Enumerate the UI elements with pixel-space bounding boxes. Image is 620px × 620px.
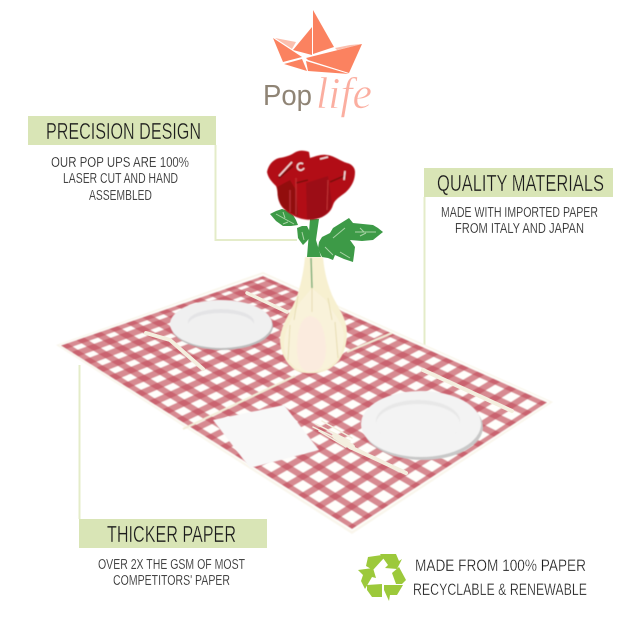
text block xyxy=(441,205,598,237)
heading: THICKER PAPER xyxy=(107,521,236,547)
knife: front right xyxy=(423,370,512,411)
logo word: life: life xyxy=(316,69,372,118)
check stripes, second direction xyxy=(62,274,548,530)
text block: LASER CUT AND HAND xyxy=(63,171,178,187)
rose bloom xyxy=(267,151,355,220)
tablecloth pop-up base xyxy=(56,272,553,534)
check stripes, first direction xyxy=(62,274,547,529)
logo word: Pop: Pop xyxy=(263,80,312,112)
text block: ASSEMBLED xyxy=(89,188,152,204)
panel: quality materials xyxy=(424,168,613,237)
fork xyxy=(313,421,406,473)
panel: precision design xyxy=(28,116,216,204)
vase xyxy=(280,257,347,373)
stem xyxy=(307,219,321,257)
icon: recycling arrows xyxy=(358,554,406,601)
cutlery xyxy=(146,293,512,473)
leader lines xyxy=(80,145,424,519)
heading bar xyxy=(28,116,216,145)
knife: back right xyxy=(247,293,287,312)
knife: back left xyxy=(146,333,203,369)
text block: OUR POP UPS ARE 100% xyxy=(51,155,189,171)
fold slits xyxy=(183,333,392,429)
text block xyxy=(51,155,189,204)
text block: FROM ITALY AND JAPAN xyxy=(455,221,584,237)
text block: OVER 2X THE GSM OF MOST xyxy=(98,557,245,573)
logo: Pop life paper boat xyxy=(263,10,372,118)
icon: origami boat xyxy=(273,10,362,74)
text block: COMPETITORS' PAPER xyxy=(113,573,230,589)
plate: front right xyxy=(361,391,483,460)
leaves xyxy=(270,209,383,262)
heading bar xyxy=(79,519,267,548)
napkin xyxy=(213,405,319,468)
pop-up rose in vase xyxy=(267,151,383,373)
plate: back left xyxy=(170,300,273,350)
heading bar xyxy=(424,168,613,197)
heading: PRECISION DESIGN xyxy=(46,118,201,144)
panel: thicker paper xyxy=(79,519,267,589)
text block xyxy=(98,557,245,589)
recycled paper note xyxy=(413,556,587,599)
